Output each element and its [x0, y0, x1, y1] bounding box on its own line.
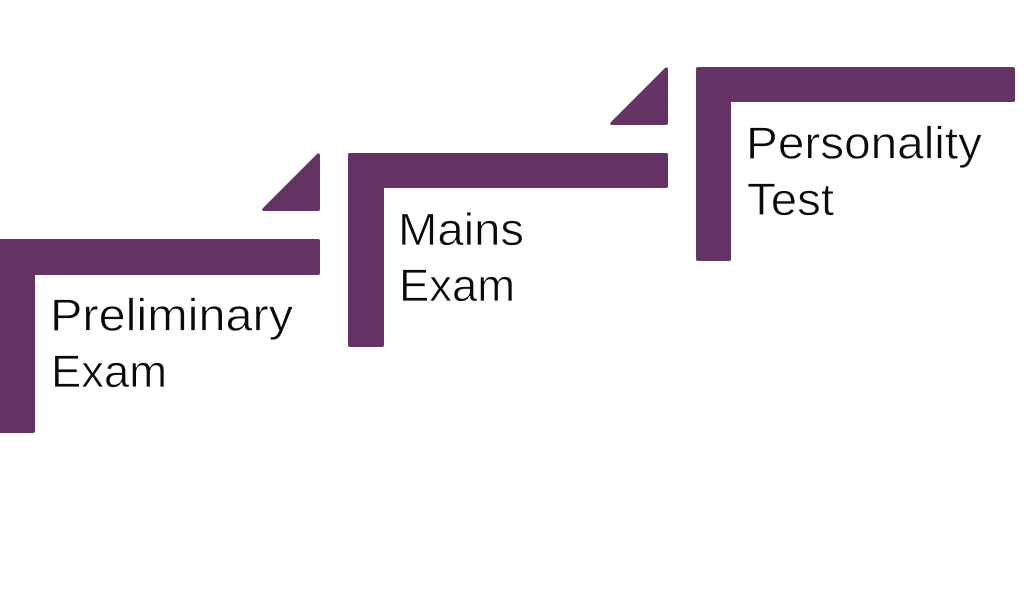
step 2: mains exam — [348, 67, 668, 347]
label: Personality Test: Test — [747, 174, 835, 225]
label: Mains Exam: Mains — [398, 204, 524, 255]
triangle 1 — [262, 153, 320, 211]
corner bracket 2 — [348, 153, 668, 347]
label: Mains Exam — [398, 204, 524, 311]
corner bracket 1 — [0, 239, 320, 433]
step 3: personality test — [696, 67, 1015, 261]
corner bracket 3 — [696, 67, 1015, 261]
label: Personality Test: Personality — [746, 118, 983, 168]
label: Preliminary Exam: Preliminary — [50, 290, 294, 340]
step 1: preliminary exam — [0, 153, 320, 433]
label: Preliminary Exam — [50, 290, 294, 397]
label: Preliminary Exam: Exam — [51, 346, 167, 397]
label: Personality Test — [746, 118, 983, 225]
triangle 2 — [610, 67, 668, 125]
label: Mains Exam: Exam — [399, 260, 515, 311]
